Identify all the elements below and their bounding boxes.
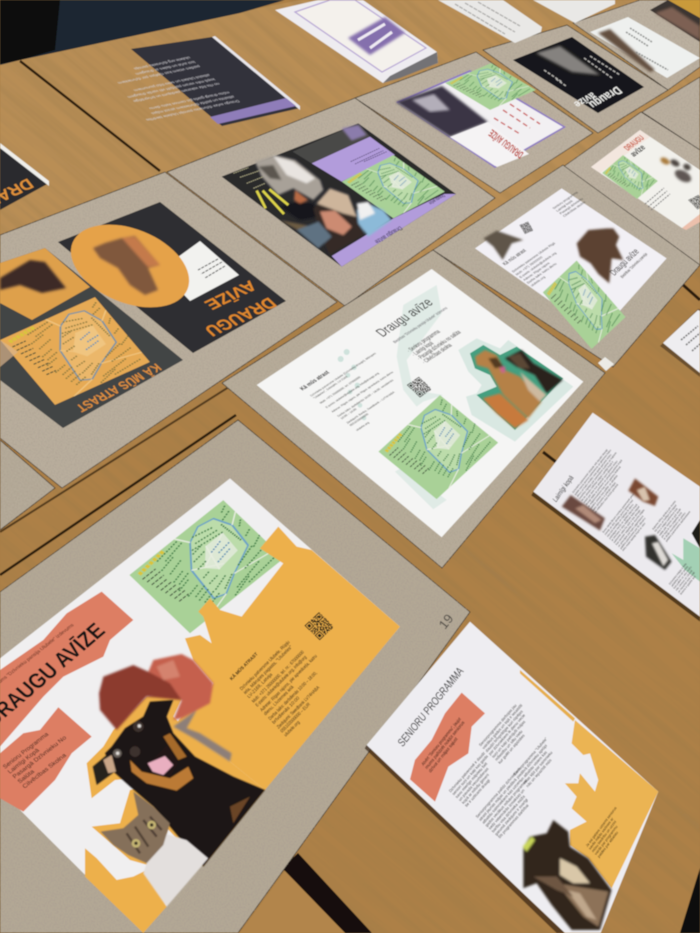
body text A: savu mierīgo mājvietu šeit	[454, 761, 489, 799]
poster: dark with orange map	[0, 248, 183, 428]
text column D: nāc ciemos uz Ulubeli	[674, 569, 694, 592]
bullet list: · Laimīgi kopā	[410, 340, 436, 358]
map	[378, 395, 498, 499]
poster: purple with photo collage and map	[222, 123, 456, 267]
body text A: un pavada vecumdienas	[457, 766, 490, 802]
orange photo	[0, 248, 90, 320]
dark band	[293, 123, 370, 163]
map	[129, 500, 284, 633]
white card	[450, 122, 529, 167]
qr code	[688, 195, 700, 209]
title: SENIORU PROGRAMMA	[396, 665, 466, 749]
yellow shape around cat	[92, 787, 173, 867]
callout text: Atvērt "Senioru programmu", ļaujot	[420, 716, 462, 767]
body text A: tie ir uzticami draugi	[464, 778, 491, 808]
bear	[577, 228, 623, 283]
dark figure in top left corner	[0, 0, 60, 64]
body text D: Seniorprogramma "Ulubele"	[512, 736, 549, 777]
small corner label on board	[598, 357, 614, 371]
poster title: Draugu	[586, 84, 625, 112]
text column B: mēs esam laimīgi kopā ar viņu	[621, 521, 647, 552]
animal collage	[659, 156, 693, 185]
how to find us body: Darba laiks: darbdienās 10:00 – 18:00,	[267, 670, 319, 722]
body text B	[474, 766, 544, 839]
body text A: seniori suņi un kaķi kas gaida	[451, 753, 490, 796]
leaflet text: Draugu avīze dzīvnieku pansija Ulubele biedrība	[144, 99, 241, 122]
text column C: valda pār visiem un guļ saulē	[658, 507, 682, 537]
programme list: Cilvēcības skolna	[562, 200, 587, 218]
leaflet: Laimigi kopa	[531, 413, 700, 622]
text column C: ar skaļu murrāšanu un prieku	[662, 511, 687, 541]
address text: Darba laiks: katru dienu	[526, 262, 558, 284]
text column B: viņu ļoti iemīlēja un rūpējas ik dienu	[606, 502, 635, 538]
lower purple strip	[332, 194, 456, 267]
address text: Dzīvnieku patversme Ulubele Rīgā	[511, 242, 556, 273]
yellow outline around dog	[87, 692, 265, 867]
person with dog	[0, 260, 66, 293]
address text: E-pasts: ulubele@ulubele.org	[518, 251, 558, 279]
address block: Dzīvnieku patversme Ulubele (Dzīvnieku draugs), Mārupes	[309, 351, 377, 397]
map	[602, 155, 658, 199]
body text A: kopā ar mīlošu ģimeni	[461, 772, 490, 805]
purple band	[312, 137, 395, 182]
table seams and dark gaps	[0, 61, 700, 575]
poster: dark with orange oval	[58, 202, 286, 353]
text column D	[668, 561, 699, 596]
body text B: sedz veterinārās izmaksas un	[487, 788, 526, 831]
body text B: atbalstu saimniekiem kas uzņem	[481, 778, 523, 825]
top leaflet: white with lilac frame	[275, 0, 438, 83]
body text C: suņi un kaķi pelnījuši mājas	[491, 719, 526, 759]
yellow paper shape	[173, 527, 400, 790]
subtitle: Biedrības "Dzīvnieku pansija	[619, 252, 649, 279]
address block: E-pasts: ulubele@ulubele.org, info@draugs.org	[324, 371, 380, 409]
text column B: paldies patversmei par šo dāvanu	[619, 516, 647, 550]
poster: lavender card with map	[396, 63, 566, 168]
address text: ulubele.org	[530, 275, 546, 287]
title: Draugu avīze	[373, 296, 437, 340]
address block: ulubele.org	[355, 421, 371, 432]
text column A	[571, 444, 634, 514]
body text B: barību visa dzīvnieka mūža	[490, 793, 527, 833]
orange oval	[59, 208, 201, 324]
leaflet text	[95, 56, 241, 122]
text on yellow: mūsu biedrību un uzzini	[591, 820, 617, 853]
poster: white with brown image strip, top right	[590, 17, 700, 78]
red dog sketch	[99, 654, 232, 762]
dog photo	[523, 820, 612, 930]
how to find us body	[239, 632, 343, 738]
red title: DRAUGU	[622, 134, 646, 152]
body text D: piedāvā dzīvnieku aprūpi	[515, 743, 548, 780]
address text: Mob: +371 26000000	[515, 256, 544, 276]
red title: DRAUGU AVĪZE	[487, 127, 526, 160]
address block: 0551020000000	[348, 412, 370, 427]
text column A: Dzīvnieku patversmē Ulubele mīt daudzi draugi	[571, 448, 609, 494]
qr code	[342, 125, 367, 141]
body text B: atrast jaunas mājas un piedāvā	[478, 777, 518, 822]
how to find us body: Dzīvnieku patversme Ulubele, Rūpju	[239, 639, 292, 692]
top leaflet: white text sheets	[438, 0, 615, 43]
cat photo	[101, 792, 208, 907]
address block: "Ulubeles", Salaspils, LV-2169	[312, 375, 349, 400]
body text C: vairākus gadus un tajā ir iesaistīti	[481, 703, 523, 750]
how to find us body: Adrese: Rīgas rajons, pie apvedceļa, katru	[259, 653, 319, 713]
text on yellow: paldies par atbalstu	[597, 831, 619, 859]
green outline behind dogs	[470, 345, 563, 430]
bullet list: · Cilvēcības skolna	[421, 343, 454, 365]
lilac image	[348, 17, 405, 55]
how to find us body: LV-2169, Latvija	[246, 672, 274, 700]
dogs and cat photo	[475, 350, 563, 428]
text on yellow	[585, 806, 630, 859]
text column C: Kaķene Mīna atnāca pie mums	[651, 499, 677, 531]
body text C: par dzīvniekiem ik dienu vecie	[487, 712, 527, 756]
body text C: kur gulēt un atpūsties	[497, 733, 526, 765]
strip title: Draugu avīze	[373, 225, 404, 245]
poster: black with draugu avize	[513, 37, 644, 113]
pale blobs behind dogs	[458, 338, 573, 442]
body text C: Seniorprogramma darbojas jau	[478, 703, 518, 747]
address block	[309, 351, 423, 432]
orange map	[0, 297, 150, 405]
menu list: Pasargā Dzīvnieku No	[12, 735, 69, 780]
how to find us body: iela, Mārupes pagasts, "Ulubeles"	[243, 644, 294, 696]
yellow shape bottom corner	[85, 848, 167, 933]
qr code	[407, 376, 432, 397]
white text box	[160, 241, 239, 301]
bullet list	[405, 322, 468, 365]
monochrome photo	[396, 86, 488, 137]
photo 3	[645, 535, 672, 570]
text column D: ikviens ir gaidīts šeit	[679, 574, 697, 596]
text column D: kas paliek uz visu mūžu	[672, 565, 693, 590]
center poster: Draugu avize	[257, 269, 583, 537]
how to find us body: brīvdienās 10:00	[271, 695, 301, 726]
text column B: kas vienmēr sagaida pie durvīm mājās	[614, 508, 646, 546]
text column C	[651, 497, 692, 543]
bullet list: · Senioru programma	[405, 329, 442, 354]
map	[543, 260, 626, 349]
body text B: šīs programmas darbībai	[497, 803, 530, 839]
orange heading: KĀ MŪS ATRAST	[72, 361, 165, 414]
text on yellow: savās mājās sazinies ar	[588, 816, 615, 851]
body text A: Dzīvnieku patversmē ir daudz	[448, 751, 486, 793]
body text D: nāc un iepazīsti mūs	[525, 758, 553, 788]
text column A: paldies visiem kas palīdz un atbalsta	[589, 473, 619, 510]
purple strip	[210, 98, 296, 124]
leaflet text: kopā mēs varam palīdzēt vēl vairāk draugiem	[126, 78, 216, 99]
bullet list: · Pasargā dzīvnieku no salūta	[415, 330, 463, 361]
text column B: ar bērniem ir viņa mīļākais laiks tagad	[610, 504, 641, 542]
front poster with dog and cat	[0, 478, 400, 933]
body text B: garumā ziedojumi ir svarīgi	[494, 797, 529, 836]
body text B: gados vecākus mīluļus programma	[484, 777, 529, 828]
salmon title banner	[0, 592, 133, 747]
bottom wooden plank and gap	[240, 853, 700, 933]
programme list: Laimīgi kopā	[555, 199, 574, 213]
text column A: ar mājdzīvniekiem kas ienes gaismu ikdienā	[587, 465, 622, 508]
body text B: Seniorprogramma palīdz dzīvniekiem	[474, 766, 522, 819]
leaflet text: paldies visiem kas rūpējas par dzīvniekiem	[116, 65, 202, 85]
how to find us heading: KĀ MŪS ATRAST	[228, 651, 259, 681]
body text A	[448, 750, 502, 808]
leaflet text: mūsu draugi gaida jūs ciemos katru dienu	[147, 91, 231, 111]
programme list	[552, 191, 589, 218]
salmon menu banner	[0, 707, 92, 812]
body text C: daudzi brīvprātīgie kuri rūpējas	[484, 709, 524, 753]
poster: cream with map	[591, 130, 700, 230]
text column B: pastaigas mežā un spēles dārzā kopā	[608, 502, 639, 540]
address block: Mob: +371 26000000, tel: 67000000	[319, 375, 362, 404]
text column D: Dzīvnieks mājās ir liela	[668, 562, 688, 586]
menu list: Laimīgi Kopā	[7, 747, 42, 775]
leaflet text: atbalsti Ulubeli un seko līdzi jaunumiem	[132, 73, 212, 92]
text column B: Suns vārdā Bruno nonāca patversmē pērn	[601, 492, 635, 534]
poster: bear, with map	[475, 188, 667, 349]
address block: Darba laiks: darbdienās 10:00 – 18:00, sestdienās	[336, 378, 395, 418]
body text D: un atbalstu visiem kas	[518, 750, 548, 782]
menu list	[2, 725, 79, 790]
title word 2: AVĪZE	[200, 277, 261, 313]
heading: Laimīgi kopā	[551, 473, 576, 504]
text column B: un priecājas par katru atgriešanos	[617, 514, 645, 548]
map side title: Draugu avīze	[427, 193, 446, 206]
green shape	[672, 538, 700, 582]
how to find us body: Ziedojumi: Swedbank LV74HABA	[276, 684, 322, 730]
photo 1	[562, 495, 605, 531]
text column B: saimnieki saka ka viņš ir īsts draugs	[612, 508, 642, 544]
callout text: dzīvot un mājas sajust	[428, 736, 459, 774]
top leaflet: black	[95, 36, 300, 126]
menu list: Cilvēcības Skolna	[22, 752, 69, 790]
text column A: katrs dzīvnieks ir pelnījis mājas	[591, 480, 617, 512]
how to find us body: ulubele.org	[283, 720, 302, 738]
pale paw prints	[338, 349, 366, 420]
body text D	[512, 736, 562, 788]
how to find us body: E-pasts: ulubele@ulubele.org, info@org	[255, 654, 308, 708]
qr code	[305, 612, 335, 640]
photo 4	[692, 520, 700, 548]
text column A: un mīlestību visa mūža garumā	[593, 482, 619, 514]
body text C: mīlestību un siltu vietu	[494, 729, 523, 762]
dogs and cat group	[458, 338, 573, 442]
text column A: lai tie atrastu mīlošas mājas Laimīgi kopā ir	[580, 460, 614, 502]
text column C: kā maza un bailīga bet tagad	[653, 503, 678, 533]
title: Draugu avīze	[608, 247, 642, 278]
address block: 10:00 – 16:00	[339, 407, 358, 420]
leaflet text: no rīta līdz vakaram ziedojumi un brīvprātīgie	[131, 82, 221, 103]
poster subtitle: avīze	[571, 90, 598, 109]
qr code	[519, 222, 534, 234]
leaflet text: ulubele.org dzīvnieku pansija	[132, 56, 192, 71]
how to find us body: Mob: +371 26000000, tel. nr.: 67000000	[251, 649, 306, 705]
body text D: vēlas kļūt par saimnieku	[522, 750, 553, 785]
pale green background shapes	[395, 285, 447, 509]
text column B: ziemā un drīz atrada jaunu ģimeni kas	[603, 497, 634, 536]
band text	[351, 148, 387, 164]
address text: Adrese: Rīgas rajons	[522, 261, 551, 282]
top left black booklet	[0, 143, 49, 221]
subtitle: Biedrības "Dzīvnieku pansija Ulubele" izdevums	[392, 306, 449, 344]
leaflet text: lasi avīzi un dalies ar draugiem	[134, 60, 197, 76]
text on yellow: Ja esi gatavs uzņemt seniorus	[585, 806, 618, 848]
programme list: Pasargā dzīvnieku	[559, 197, 584, 215]
text column D: atbildība bet arī prieks	[670, 564, 690, 588]
how to find us body: dienu, Līvzemes ielā	[263, 684, 295, 717]
body text C	[478, 700, 539, 765]
address text	[511, 242, 575, 287]
dog photo	[93, 700, 265, 867]
map	[445, 63, 536, 110]
text column C: paldies patversmes darbiniekiem	[664, 509, 692, 543]
callout text: mums palīdzēt nokļūt seniorus	[424, 719, 466, 770]
text column A: dienu un katru nedēļu visa gada garumā mūsu	[576, 452, 613, 498]
programme list: Senioru programma	[552, 191, 579, 210]
text column B	[601, 492, 655, 552]
leaflet text: atbalsta un palīdz dzīvniekiem atrast mājas	[150, 95, 236, 115]
small white poster at right edge	[660, 309, 700, 377]
map	[342, 155, 445, 218]
text column A: stāsti par tiem kuri atraduši savu ģimeni mūsu	[581, 458, 619, 504]
handwritten number on board: 19	[436, 611, 456, 632]
address block: Adrese: Rīgas rajons, pie Rīgas apvedceļa, katru dienu	[330, 370, 395, 413]
address block: Ziedojumi: Banka, Swedbank – LV74HABA	[345, 391, 396, 424]
heading: Kā mūs atrast	[299, 369, 332, 392]
yellow marks	[257, 189, 288, 214]
salmon callout	[410, 693, 485, 802]
how to find us body: 055102000000 – EUR	[279, 701, 312, 734]
cat photo	[483, 231, 523, 260]
top right corner poster	[650, 0, 700, 42]
text column C: pie loga ik rītu sagaida mūs	[660, 510, 683, 539]
dark floor at top left	[0, 0, 285, 65]
side text	[233, 168, 265, 188]
text on yellow: vairāk par programmu	[594, 825, 618, 856]
text column C: viņa ir mājas saimniece kas	[656, 506, 679, 535]
heading: Kā mūs atrast	[502, 248, 528, 267]
dog photo	[93, 236, 160, 295]
text column D: un iepazīsti mūs tuvāk	[677, 570, 696, 594]
leaflet: Senioru programma	[365, 622, 658, 933]
menu list: Senioru Programma	[2, 731, 51, 770]
text column A: draugi dalās ar priekiem un piedzīvojumiem kopā	[584, 458, 623, 506]
text column A: gaida savus jaunos saimniekus un ģimenes katru	[573, 447, 612, 496]
title word 1: DRAUGU	[200, 294, 281, 340]
menu list: Salūta	[17, 769, 37, 785]
black subtitle: avīze	[628, 143, 648, 158]
photo 2	[628, 478, 658, 506]
text column A: biedrība rūpējas par pamestiem suņiem un kaķiem	[578, 450, 618, 500]
photo: person with dog	[255, 155, 392, 255]
monochrome photo	[536, 46, 600, 75]
yellow paper shape	[565, 720, 658, 888]
